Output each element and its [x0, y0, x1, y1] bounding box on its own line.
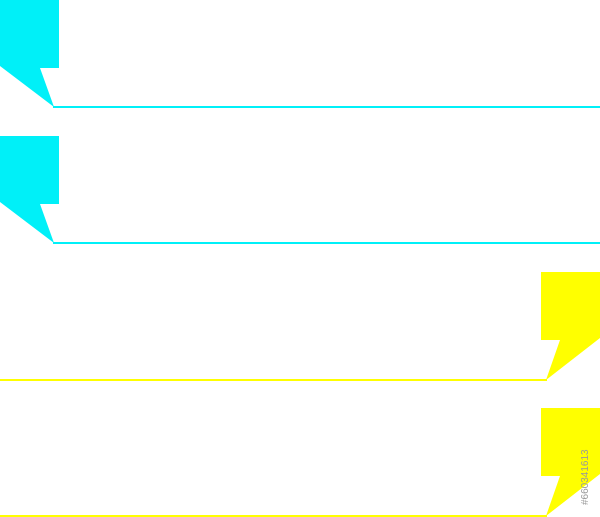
banner 2: cyan	[0, 136, 600, 244]
watermark id text: #660341613	[580, 449, 591, 505]
banner 1: cyan	[0, 0, 600, 108]
banner 4: yellow	[0, 408, 600, 517]
banner 3: yellow	[0, 272, 600, 381]
